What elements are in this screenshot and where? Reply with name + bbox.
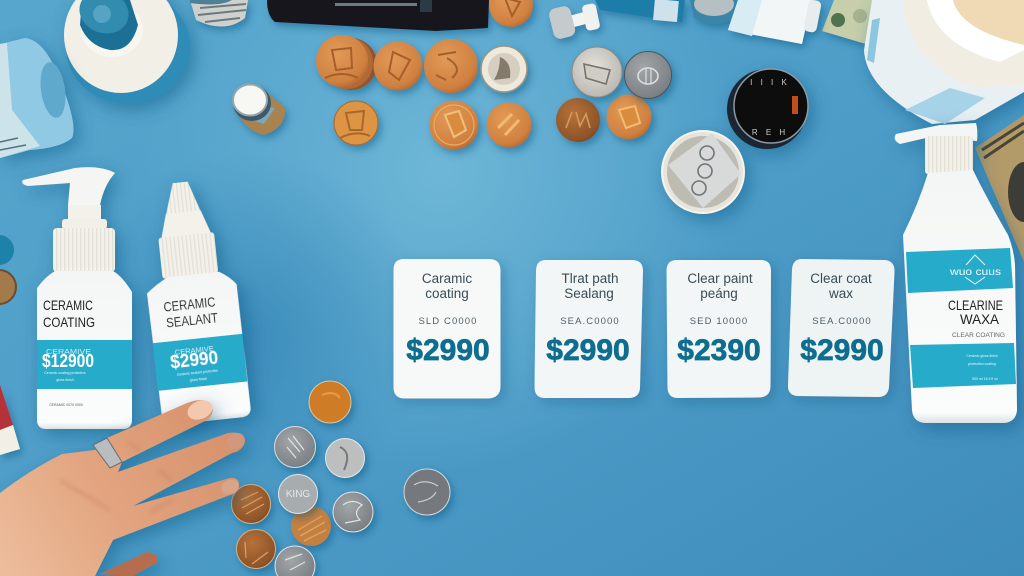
pump head [22, 167, 115, 205]
bottle: clearing wax [895, 123, 1017, 423]
card name: wax [828, 286, 853, 301]
card code: SLD C0000 [418, 316, 478, 327]
coin: orange hatch [291, 506, 331, 546]
card price: $2390 [677, 334, 761, 367]
card price: $2990 [406, 334, 490, 367]
bottle: ceramic coating: gloss finish [56, 378, 74, 382]
ribbed cap [158, 232, 218, 279]
white bottle with teal cap [64, 0, 190, 104]
band small text: CERAMIVE [174, 344, 214, 357]
teal band bottom [910, 343, 1016, 388]
coin [374, 42, 422, 90]
pinky finger [100, 552, 158, 576]
logo icon [965, 255, 985, 284]
coin: silver right [404, 469, 450, 515]
card code: SED 10000 [690, 316, 748, 327]
body [37, 271, 132, 429]
ribbed collar [925, 136, 973, 174]
white jar top right [864, 0, 1024, 124]
left edge coin [0, 270, 16, 304]
brand: wuo cuus [949, 267, 1001, 278]
product name: WAXA [960, 311, 1000, 327]
coin [430, 100, 478, 150]
coin [334, 101, 378, 145]
ring [93, 438, 122, 468]
coins bottom group [232, 381, 450, 576]
coin: top edge copper [489, 0, 533, 27]
card name: Sealang [564, 286, 614, 301]
tube and cap top [548, 0, 822, 44]
hand with ring [0, 397, 247, 576]
card name: Tlrat path [561, 271, 619, 286]
coin: grey silver [624, 52, 672, 98]
card name: coating [425, 286, 469, 301]
fingernail: middle [225, 430, 247, 452]
bottle: ceramic coating [22, 167, 132, 429]
sub label: CLEAR COATING [952, 332, 1005, 339]
product name [163, 293, 219, 331]
bottle: ceramic sealant: gloss finish [189, 377, 207, 383]
coin [606, 94, 652, 140]
product name: CLEARINE [948, 297, 1003, 313]
copper coins top group [316, 0, 672, 150]
product name [43, 297, 95, 330]
knuckle shading [60, 442, 172, 512]
card name: Clear coat [810, 271, 872, 286]
coin [424, 39, 478, 93]
price card 4 [788, 259, 895, 397]
card name: Clear paint [687, 271, 753, 286]
fingernail: index [185, 397, 215, 423]
red tube left edge [0, 385, 20, 455]
bill: top right banknote [822, 0, 885, 44]
band small text: CERAMIVE [46, 347, 91, 356]
white dish with embossed block [662, 131, 744, 213]
ribbed cap [53, 228, 115, 272]
coin: silver embossed: KING [286, 489, 310, 500]
teal band top [906, 248, 1013, 293]
coin: brown [232, 484, 270, 524]
hand and fingers [0, 400, 245, 576]
card name: peáng [700, 286, 738, 301]
coin: brown lower [236, 530, 276, 568]
coin: light silver [326, 438, 364, 478]
product name: CERAMIC [43, 297, 93, 313]
coin: silver bottom [275, 546, 315, 576]
product name: SEALANT [165, 309, 219, 331]
band text: Ceramic gloss finish [966, 354, 998, 358]
small vial with silver cap [233, 84, 285, 135]
bottle: clearing wax: protection coating [968, 362, 996, 366]
band price: $12900 [42, 351, 94, 371]
card code: SEA.C0000 [560, 316, 620, 327]
body [903, 170, 1017, 423]
coin: silver wave [333, 492, 373, 532]
band detail: Ceramic sealant protective [177, 368, 218, 377]
card code: SEA.C0000 [812, 316, 872, 327]
teal band [153, 334, 247, 391]
black dial jar: I I I K [750, 78, 790, 87]
bottle: ceramic sealant [136, 178, 251, 426]
black dial jar [727, 69, 808, 149]
bill: right edge banknote [975, 115, 1024, 262]
bottom small print: CERAMIC 0070 0000 [49, 403, 83, 407]
black device top [267, 0, 489, 31]
coin: silver embossed [278, 474, 318, 514]
band price: $2990 [169, 347, 219, 372]
left edge blue knob [0, 235, 14, 265]
pump head [895, 123, 977, 144]
price card 3 [666, 260, 771, 398]
coin: pale silver [572, 47, 622, 97]
fingernail: ring finger [219, 477, 241, 497]
body [146, 270, 251, 426]
band detail: Ceramic coating protective [44, 371, 86, 375]
coin stack [316, 35, 377, 90]
black dial jar: R E H [752, 128, 788, 137]
coin: orange [309, 381, 351, 423]
coin: silver [274, 426, 316, 468]
coin: dark copper [556, 98, 600, 142]
price card 2 [534, 260, 643, 398]
card name: Caramic [422, 271, 472, 286]
price card 1 [394, 259, 500, 398]
nozzle [163, 181, 201, 215]
coin: silver portrait [481, 46, 527, 92]
bottle: clearing wax: 500 ml 16.9 fl oz [972, 377, 998, 381]
card price: $2990 [546, 334, 630, 367]
product name: COATING [43, 314, 95, 330]
coin [486, 102, 532, 148]
pale blue bottle left [0, 38, 74, 158]
product name: CERAMIC [163, 293, 216, 315]
teal band [37, 340, 132, 389]
ribbed cylinder top [190, 0, 248, 27]
card price: $2990 [800, 334, 884, 367]
product name [948, 297, 1003, 327]
